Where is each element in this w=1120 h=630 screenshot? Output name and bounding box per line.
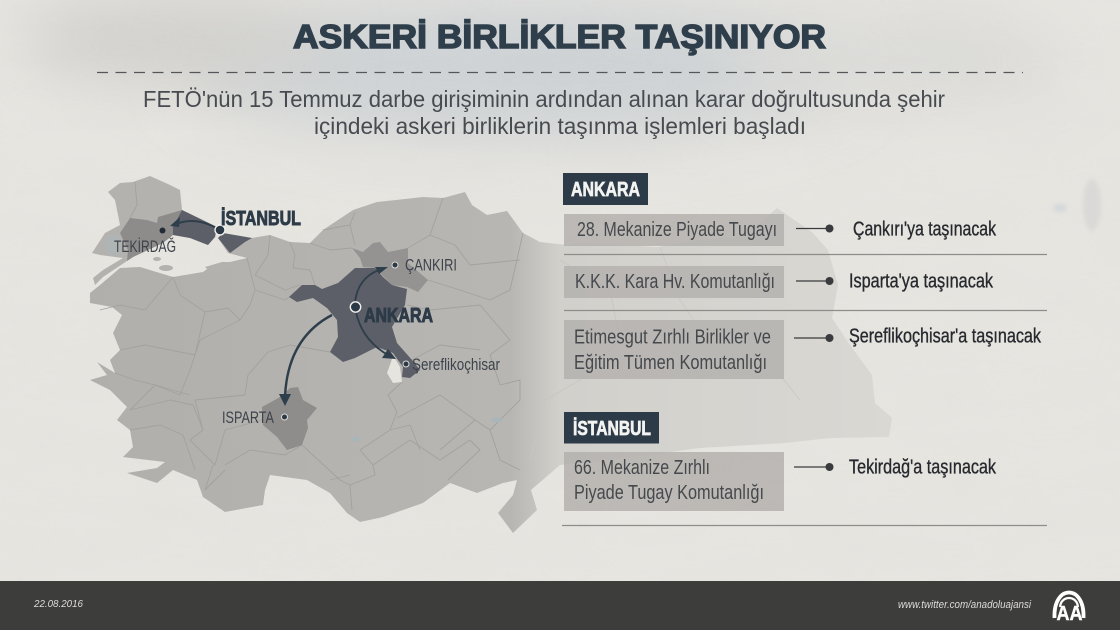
province: Ankara xyxy=(289,268,420,378)
marker: Çankırı xyxy=(392,262,398,268)
subtitle xyxy=(143,86,945,139)
heading: Ankara xyxy=(563,173,648,205)
row: 66. Mekanize Zırhlı Piyade Tugay Komutanlığı xyxy=(564,452,997,511)
land: Thrace xyxy=(92,176,217,285)
arrow: Ankara to Isparta xyxy=(279,315,332,406)
panel: Ankara relocations xyxy=(563,173,1047,379)
label: Isparta: ISPARTA xyxy=(222,408,274,427)
row: Etimesgut Zırhlı Birlikler ve Eğitim Tümen Komutanlığı: Şereflikoçhisar'a taşınacak xyxy=(849,326,1042,348)
subtitle: FETÖ'nün 15 Temmuz darbe girişiminin ardından alınan karar doğrultusunda şehir xyxy=(143,86,945,112)
marker: Isparta xyxy=(282,414,288,420)
Tuz lake xyxy=(387,355,402,383)
heading: Ankara: ANKARA xyxy=(571,179,640,201)
marker: Tekirdağ xyxy=(160,228,166,234)
twitter address: www.twitter.com/anadoluajansi xyxy=(898,599,1031,611)
subtitle: içindeki askeri birliklerin taşınma işlemleri başladı xyxy=(314,113,806,139)
row: 28. Mekanize Piyade Tugayı xyxy=(564,214,997,246)
map of Turkey xyxy=(90,176,892,533)
province: İstanbul xyxy=(173,210,252,253)
row: K.K.K. Kara Hv. Komutanlığı: Isparta'ya taşınacak xyxy=(849,270,994,292)
footer bar xyxy=(0,581,1120,630)
marker: İstanbul xyxy=(215,225,225,235)
province borders xyxy=(100,182,800,510)
islands xyxy=(153,257,238,272)
province: Isparta xyxy=(262,387,317,450)
row: 28. Mekanize Piyade Tugayı: 28. Mekanize Piyade Tugayı xyxy=(577,219,777,241)
row: 66. Mekanize Zırhlı Piyade Tugay Komutanlığı: 66. Mekanize Zırhlı xyxy=(574,457,710,479)
label: Ankara: ANKARA xyxy=(364,305,433,327)
heading: İstanbul xyxy=(564,412,659,444)
marker: Ankara xyxy=(350,302,361,312)
land: Anatolia xyxy=(90,192,892,533)
icon: Anadolu Agency logo xyxy=(1054,592,1084,625)
heading: İstanbul: İSTANBUL xyxy=(573,417,651,440)
title: ASKERİ BİRLİKLER TAŞINIYOR xyxy=(293,18,826,55)
label: İstanbul: İSTANBUL xyxy=(221,207,301,230)
row: 66. Mekanize Zırhlı Piyade Tugay Komutanlığı: Tekirdağ'a taşınacak xyxy=(849,456,997,478)
arrow: Ankara to Şereflikoçhisar xyxy=(356,312,396,359)
row: 28. Mekanize Piyade Tugayı: Çankırı'ya taşınacak xyxy=(853,218,997,240)
row: Etimesgut Zırhlı Birlikler ve Eğitim Tümen Komutanlığı xyxy=(564,320,1042,379)
icon: Anadolu Agency logo: AA xyxy=(1056,603,1082,625)
arrow: Ankara to Çankırı xyxy=(355,267,388,302)
marker: Şereflikoçhisar xyxy=(403,361,409,367)
lakes xyxy=(105,234,503,442)
row: K.K.K. Kara Hv. Komutanlığı: K.K.K. Kara Hv. Komutanlığı xyxy=(575,271,775,293)
panel: İstanbul relocations xyxy=(562,412,1047,526)
label: Şereflikoçhisar: Şereflikoçhisar xyxy=(412,355,500,374)
province: Çankırı xyxy=(352,242,428,292)
row: Etimesgut Zırhlı Birlikler ve Eğitim Tümen Komutanlığı: Etimesgut Zırhlı Birlikler ve xyxy=(574,326,771,348)
label: Tekirdağ: TEKİRDAĞ xyxy=(114,237,176,256)
province: Tekirdağ xyxy=(120,210,182,261)
row: Etimesgut Zırhlı Birlikler ve Eğitim Tümen Komutanlığı: Eğitim Tümen Komutanlığı xyxy=(574,352,767,374)
arrow: İstanbul to Tekirdağ xyxy=(170,217,218,229)
row: 66. Mekanize Zırhlı Piyade Tugay Komutanlığı: Piyade Tugay Komutanlığı xyxy=(574,482,764,504)
label: Çankırı: ÇANKIRI xyxy=(405,256,457,274)
date: 22.08.2016 xyxy=(33,599,83,610)
row: K.K.K. Kara Hv. Komutanlığı xyxy=(564,266,994,298)
